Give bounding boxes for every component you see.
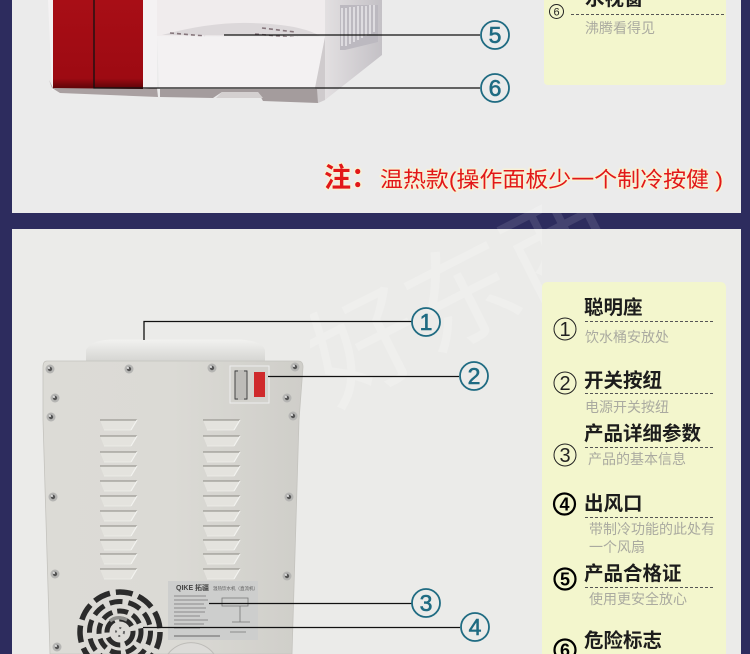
legend item 5: 产品合格证	[584, 563, 682, 585]
marker 3: 3	[420, 590, 432, 616]
note text: 注：	[324, 163, 378, 193]
callout line 4	[94, 0, 480, 88]
marker 1: 1	[420, 309, 432, 335]
callout line 3	[209, 602, 412, 604]
legend item 4: 出风口	[584, 493, 643, 515]
legend item 4: 带制冷功能的此处有	[589, 521, 715, 537]
legend item 5: 5	[560, 570, 570, 590]
legend item 2: 电源开关按纽	[585, 399, 669, 415]
illustration: water dispenser front	[48, 0, 382, 103]
legend item 2: 2	[559, 373, 571, 395]
marker 5	[481, 21, 509, 49]
legend item 3: 产品的基本信息	[588, 451, 686, 467]
marker 6	[481, 74, 509, 102]
marker 4	[461, 613, 489, 641]
callout line 4	[143, 626, 460, 628]
marker 6: 6	[489, 75, 501, 101]
vents	[100, 420, 240, 579]
callout line 1	[144, 322, 412, 340]
legend item 3	[554, 422, 713, 467]
marker 2	[460, 362, 488, 390]
legend item 5: 使用更安全放心	[589, 591, 687, 607]
legend item 1	[554, 296, 713, 345]
legend item 6: 6	[553, 6, 560, 18]
marker 4: 4	[469, 614, 482, 640]
callout line 5	[224, 34, 480, 36]
illustration: water dispenser back	[43, 340, 303, 654]
product label: 温热饮水机（直流机）	[213, 585, 258, 592]
legend item 6: 危险标志	[584, 629, 662, 652]
marker 1	[412, 308, 440, 336]
panel: back view	[12, 229, 741, 654]
legend panel: bottom	[542, 282, 726, 654]
legend item 1: 饮水桶安放处	[585, 329, 669, 345]
legend item 1: 1	[559, 319, 571, 341]
watermark over panels: 好东西	[289, 168, 638, 428]
legend item 6	[550, 0, 724, 36]
screws	[46, 362, 300, 652]
legend item 6: 沸腾看得见	[585, 20, 655, 36]
legend item 3: 3	[559, 445, 571, 467]
power switch	[230, 366, 269, 403]
legend item 3: 产品详细参数	[584, 422, 702, 445]
certificate seal	[168, 643, 214, 654]
legend item 4: 4	[559, 494, 570, 514]
product label: QIKE 拓疆	[176, 583, 209, 592]
legend item 5	[554, 563, 713, 607]
bucket seat	[86, 340, 265, 362]
note text	[324, 163, 723, 193]
watermark: 好东西	[289, 168, 638, 428]
note text: 温热款(操作面板少一个制冷按健 )	[380, 168, 723, 192]
product label	[168, 581, 258, 640]
legend item 4	[554, 493, 715, 555]
marker 5: 5	[489, 22, 501, 48]
legend item 4: 一个风扇	[589, 539, 645, 555]
legend item 6	[554, 629, 662, 654]
fan grille	[80, 592, 160, 654]
callout line 2	[268, 376, 459, 378]
marker 3	[412, 589, 440, 617]
legend panel: top	[544, 0, 726, 85]
back plate	[43, 361, 303, 654]
legend item 1: 聪明座	[584, 296, 643, 319]
legend item 2	[554, 369, 713, 415]
legend item 2: 开关按纽	[584, 369, 662, 392]
marker 2: 2	[468, 363, 480, 389]
panel: front view	[12, 0, 741, 213]
